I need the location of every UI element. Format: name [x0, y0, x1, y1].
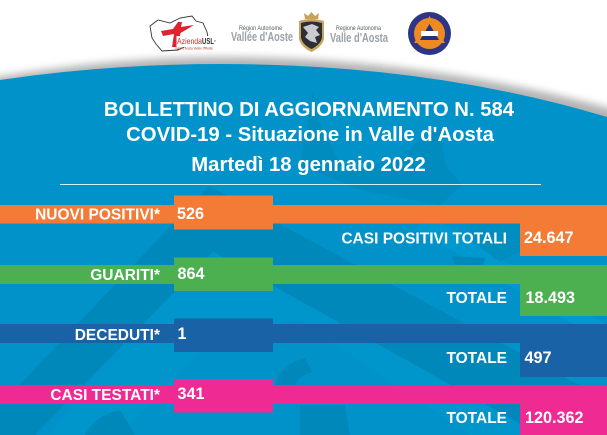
row: nuovi positivi: 526: [177, 205, 204, 223]
row: guariti: 864: [178, 265, 205, 283]
row: guariti: TOTALE: [446, 290, 507, 307]
logo: coat of arms shield: [299, 12, 324, 52]
title: Martedì 18 gennaio 2022: [191, 154, 426, 176]
row: casi testati: [0, 379, 607, 435]
logo: Regione Autonoma Valle d'Aosta: Regione Autonoma: [336, 26, 382, 32]
row: casi testati: CASI TESTATI*: [50, 387, 161, 404]
logo: Protezione Civile: [408, 12, 451, 55]
row: nuovi positivi: 24.647: [524, 229, 574, 247]
logo: Regione Autonoma Valle d'Aosta: [330, 26, 389, 45]
row: nuovi positivi: CASI POSITIVI TOTALI: [341, 230, 507, 248]
title: BOLLETTINO DI AGGIORNAMENTO N. 584: [104, 99, 515, 121]
logo: Azienda USL: Valle d'Aosta Vallée d'Aoste: [175, 46, 213, 50]
logo: Regione Autonoma Valle d'Aosta: Valle d'Aosta: [330, 31, 389, 45]
row: deceduti: 1: [178, 325, 187, 343]
row: deceduti: DECEDUTI*: [75, 327, 161, 344]
row: guariti: [0, 258, 607, 316]
logo: Région Autonome Vallée d'Aoste: Vallée d'Aoste: [231, 30, 293, 44]
row: casi testati: 120.362: [525, 409, 584, 427]
title: [104, 99, 515, 176]
logo: Azienda USL: USL: [202, 37, 214, 46]
logo: Région Autonome Vallée d'Aoste: Région Autonome: [239, 26, 283, 32]
row: deceduti: TOTALE: [446, 350, 507, 367]
logo: Région Autonome Vallée d'Aoste: [231, 26, 293, 44]
logo: Azienda USL: Azienda: [177, 37, 202, 46]
row: guariti: GUARITI*: [90, 267, 161, 284]
title divider: [60, 184, 541, 185]
curved shadow under header: [0, 57, 607, 140]
watermark crest pattern: [0, 92, 607, 435]
row: deceduti: [0, 318, 607, 377]
row: casi testati: TOTALE: [446, 410, 507, 427]
title: COVID-19 - Situazione in Valle d'Aosta: [126, 124, 495, 146]
row: nuovi positivi: [0, 196, 607, 256]
logo: Azienda USL: [150, 16, 215, 51]
row: nuovi positivi: NUOVI POSITIVI*: [35, 206, 161, 224]
row: casi testati: 341: [178, 385, 205, 403]
row: guariti: 18.493: [526, 289, 575, 307]
row: deceduti: 497: [524, 349, 552, 367]
